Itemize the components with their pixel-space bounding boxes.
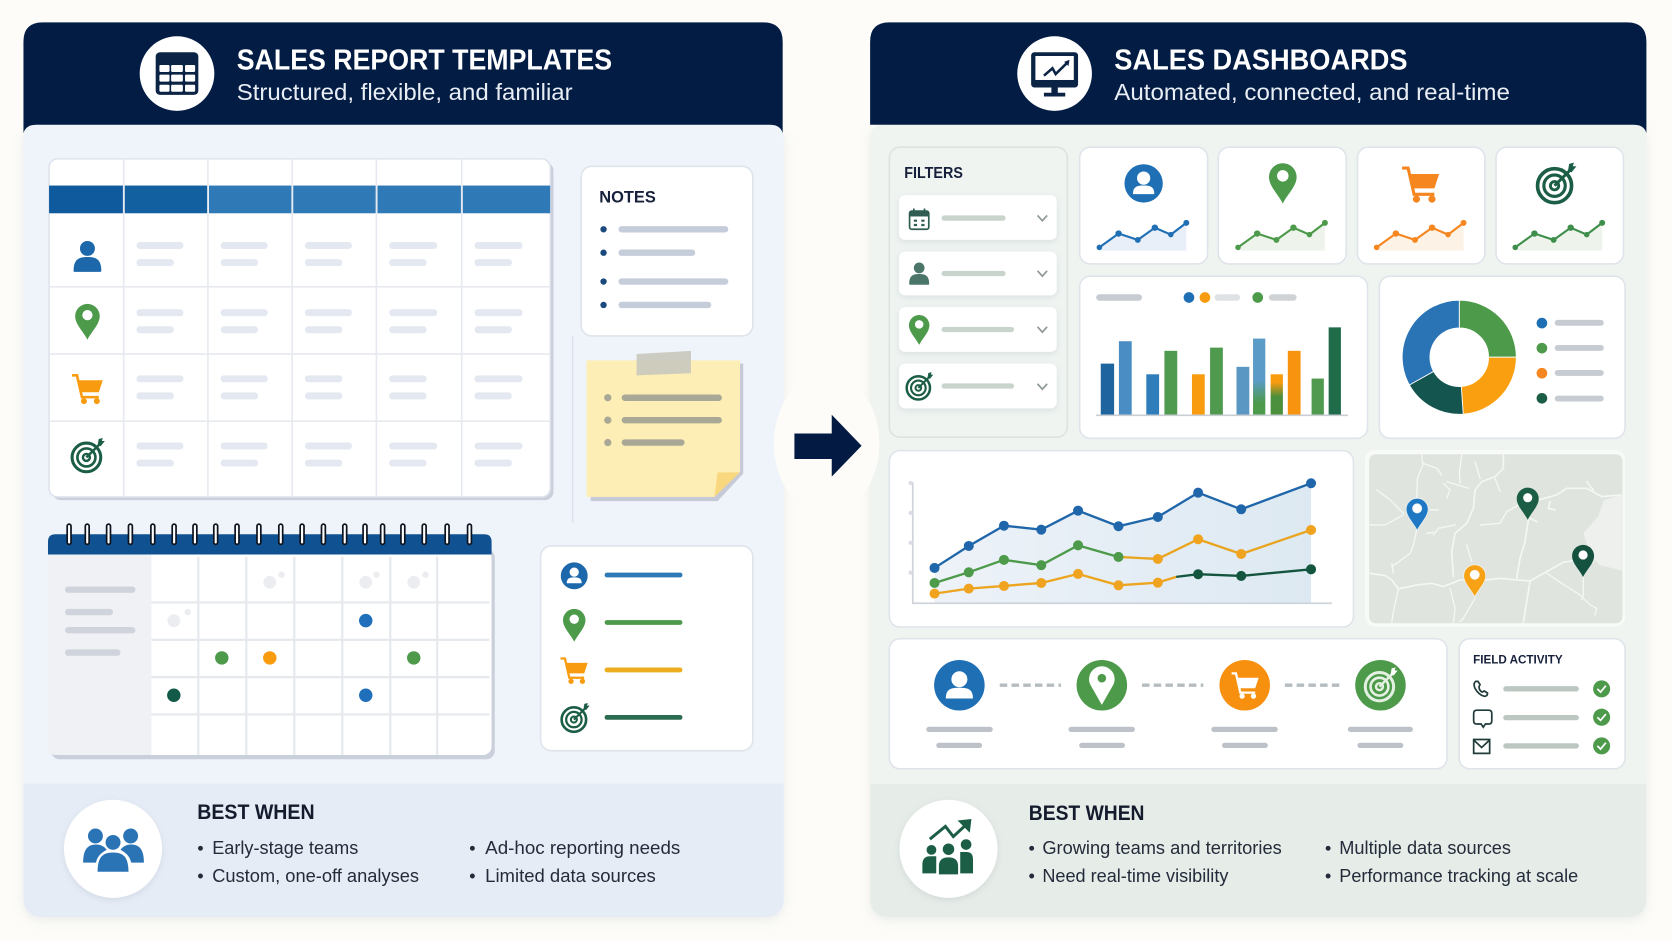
title: SALES DASHBOARDS <box>1114 44 1408 76</box>
icon: person <box>909 263 929 285</box>
icon: pin <box>909 315 929 345</box>
step: cart <box>1211 660 1278 748</box>
bullet list: Early-stage teams <box>212 837 358 858</box>
panel body <box>870 125 1646 917</box>
bullet list: Performance tracking at scale <box>1339 865 1578 886</box>
filters heading: FILTERS <box>904 165 963 182</box>
panel: sales dashboards <box>870 22 1646 917</box>
map card <box>1365 450 1625 627</box>
subtitle: Structured, flexible, and familiar <box>237 79 573 105</box>
step: target <box>1348 660 1413 748</box>
pipeline card <box>889 639 1447 769</box>
bullet list: Limited data sources <box>485 865 656 886</box>
icon: table in circle <box>140 36 214 111</box>
bullet list <box>198 837 680 886</box>
panel body <box>23 125 784 917</box>
legend card <box>541 546 753 751</box>
step: person <box>926 660 993 748</box>
donut chart card <box>1379 276 1625 438</box>
KPI card: cart <box>1357 147 1485 264</box>
panel: sales report templates <box>23 22 784 917</box>
lighter map region <box>1583 495 1622 570</box>
icon: target <box>72 438 105 472</box>
icon: phone <box>1474 681 1488 696</box>
series: orange to dark green <box>930 564 1316 599</box>
footer: best when (templates) <box>23 784 784 917</box>
line chart card <box>889 451 1353 627</box>
check marks <box>1593 680 1610 754</box>
bullet list: Need real-time visibility <box>1042 865 1229 886</box>
icon: pin <box>563 609 585 642</box>
bullet list <box>1029 837 1578 886</box>
icon: chat <box>1474 710 1492 727</box>
KPI card: territory <box>1218 147 1346 264</box>
bullet list: Ad-hoc reporting needs <box>485 837 680 858</box>
icon: person <box>74 241 101 272</box>
field activity card <box>1459 639 1625 769</box>
KPI card: target <box>1496 147 1623 264</box>
notes heading: NOTES <box>599 188 656 207</box>
notes card <box>581 166 753 336</box>
header band <box>23 22 783 133</box>
icon: calendar <box>910 208 929 229</box>
field activity heading: FIELD ACTIVITY <box>1473 652 1563 666</box>
title: SALES REPORT TEMPLATES <box>237 44 612 76</box>
sticky note <box>586 351 743 501</box>
binder rings <box>67 524 471 544</box>
KPI card: person <box>1080 147 1208 264</box>
series: blue <box>930 478 1316 573</box>
icon: growing team <box>899 800 998 898</box>
icon: pin <box>75 304 100 340</box>
icon: person badge <box>561 562 588 589</box>
roads <box>1370 455 1621 622</box>
icon: monitor in circle <box>1017 36 1092 111</box>
icon: target <box>907 372 933 400</box>
best when heading: BEST WHEN <box>1029 802 1144 825</box>
subtitle: Automated, connected, and real-time <box>1114 79 1510 105</box>
arrow: templates to dashboards <box>774 373 879 514</box>
filters panel <box>889 147 1067 437</box>
map pins <box>1406 498 1428 530</box>
divider <box>572 336 574 523</box>
icon: cart <box>561 658 588 684</box>
wall calendar <box>48 524 495 759</box>
icon: team <box>64 800 162 898</box>
spreadsheet table <box>49 159 553 500</box>
bar chart card <box>1080 276 1368 438</box>
step: pin <box>1068 660 1135 748</box>
header band <box>870 22 1646 133</box>
series: green to orange <box>930 525 1316 588</box>
bullet list: Growing teams and territories <box>1042 837 1282 858</box>
icon: target <box>562 703 590 732</box>
icon: mail <box>1474 740 1490 753</box>
icon: cart <box>72 375 103 404</box>
bullet list: Custom, one-off analyses <box>212 865 419 886</box>
best when heading: BEST WHEN <box>197 801 315 824</box>
bullet list: Multiple data sources <box>1339 837 1511 858</box>
footer: best when (dashboards) <box>870 784 1646 917</box>
